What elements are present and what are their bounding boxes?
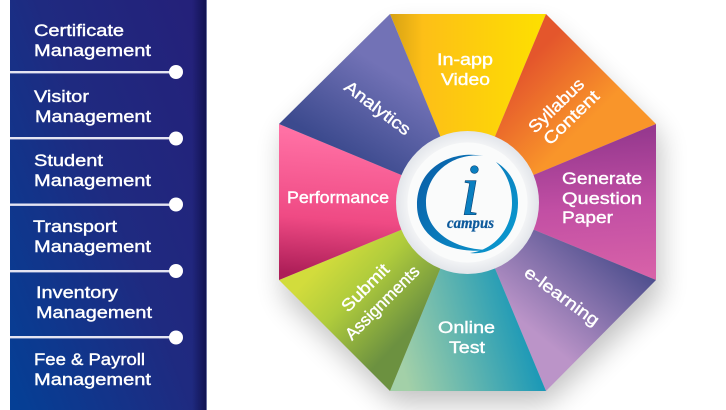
- segment: In-app Video: In-app: [437, 50, 493, 69]
- item: Student Management: [10, 151, 183, 212]
- segment: e-learning: e-learning: [521, 263, 603, 330]
- octagon wheel: [279, 14, 656, 391]
- segment: Syllabus Content: [468, 14, 656, 202]
- logo swoosh: [417, 155, 490, 251]
- panel: management list: [10, 0, 207, 410]
- item: Inventory Management: [10, 283, 183, 344]
- item: Transport Management: Management: [34, 237, 151, 256]
- segment: Generate Question Paper: Generate: [562, 169, 642, 188]
- item: Visitor Management: [10, 87, 183, 146]
- item: Certificate Management: Management: [34, 41, 151, 60]
- segment: Submit Assignments: Submit: [337, 260, 393, 316]
- item: Visitor Management: Management: [35, 107, 151, 126]
- item: Visitor Management: Visitor: [34, 87, 89, 106]
- logo letter i: i: [460, 150, 481, 232]
- segment: Online Test: Online: [438, 318, 495, 337]
- segment: Syllabus Content: Syllabus: [525, 75, 588, 137]
- segment: Generate Question Paper: [468, 124, 656, 280]
- segment: Submit Assignments: Assignments: [341, 262, 423, 344]
- item: Transport Management: [10, 217, 183, 278]
- segment: Submit Assignments: [279, 202, 468, 391]
- item: Transport Management: Transport: [33, 217, 117, 236]
- segment: Generate Question Paper: Paper: [562, 208, 613, 227]
- segment: Syllabus Content: Content: [540, 86, 603, 149]
- item: Fee & Payroll Management: [34, 350, 151, 389]
- segment: Online Test: [390, 202, 546, 391]
- item: Certificate Management: Certificate: [34, 21, 124, 40]
- logo wordmark: campus: [447, 215, 494, 232]
- item: Student Management: Student: [34, 151, 103, 170]
- segment: e-learning: [468, 202, 656, 391]
- item: Fee & Payroll Management: Fee & Payroll: [34, 350, 145, 369]
- segment: Analytics: [279, 14, 468, 202]
- item: Student Management: Management: [34, 171, 151, 190]
- item: Fee & Payroll Management: Management: [34, 370, 151, 389]
- segment: Performance: [279, 124, 468, 280]
- item: Inventory Management: Inventory: [36, 283, 119, 302]
- segment: In-app Video: Video: [441, 70, 490, 89]
- segment: Performance: Performance: [287, 188, 389, 207]
- segment: Analytics: Analytics: [341, 77, 414, 139]
- segment: Generate Question Paper: Question: [562, 189, 642, 208]
- item: Certificate Management: [10, 21, 183, 79]
- octagon shadow: [284, 30, 660, 404]
- center logo: iCampus: [396, 131, 539, 274]
- item: Inventory Management: Management: [36, 303, 152, 322]
- segment: Online Test: Test: [449, 338, 485, 357]
- segment: In-app Video: [390, 14, 546, 202]
